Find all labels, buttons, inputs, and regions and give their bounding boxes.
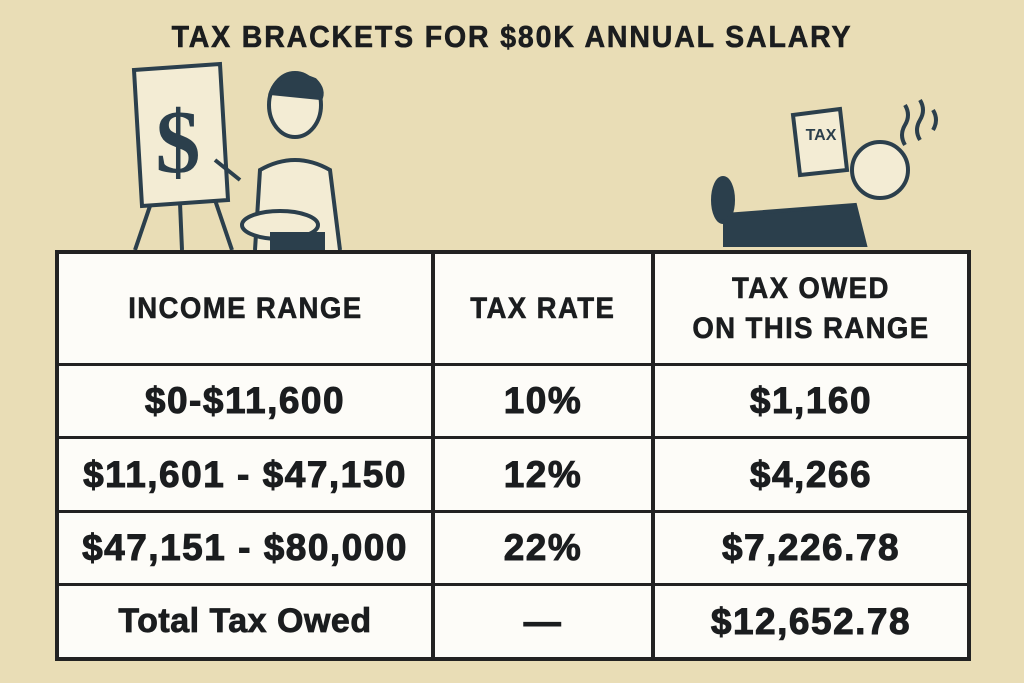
header: income range: INCOME RANGE <box>128 292 362 325</box>
row total: Total Tax Owed <box>118 602 372 640</box>
illustration: painter with dollar sign <box>132 62 342 250</box>
row 2 <box>83 454 872 494</box>
row 3: $7,226.78 <box>722 527 900 568</box>
row 1: $0-$11,600 <box>145 380 345 421</box>
header: tax owed: TAX OWED <box>732 272 890 305</box>
row total <box>118 600 911 642</box>
header: tax rate: TAX RATE <box>471 292 615 325</box>
row 1: 10% <box>504 380 582 421</box>
title: TAX BRACKETS FOR $80K ANNUAL SALARY <box>172 19 852 54</box>
row 1 <box>144 380 872 421</box>
row 2: 12% <box>504 454 582 494</box>
row total: — <box>524 600 562 642</box>
row 2: $4,266 <box>750 454 872 494</box>
row 3: $47,151 - $80,000 <box>82 527 408 568</box>
illustration: man lying with tax paper <box>711 99 938 247</box>
row 3: 22% <box>504 527 582 568</box>
table <box>55 250 971 661</box>
row 1: $1,160 <box>750 380 872 421</box>
row 3 <box>82 527 900 568</box>
header: tax owed: ON THIS RANGE <box>692 312 930 345</box>
row total: $12,652.78 <box>711 600 911 642</box>
illustration: painter with dollar sign: $ <box>156 93 200 192</box>
row 2: $11,601 - $47,150 <box>83 454 407 494</box>
illustration: man lying with tax paper: TAX <box>806 127 837 144</box>
header: tax owed <box>692 272 930 345</box>
